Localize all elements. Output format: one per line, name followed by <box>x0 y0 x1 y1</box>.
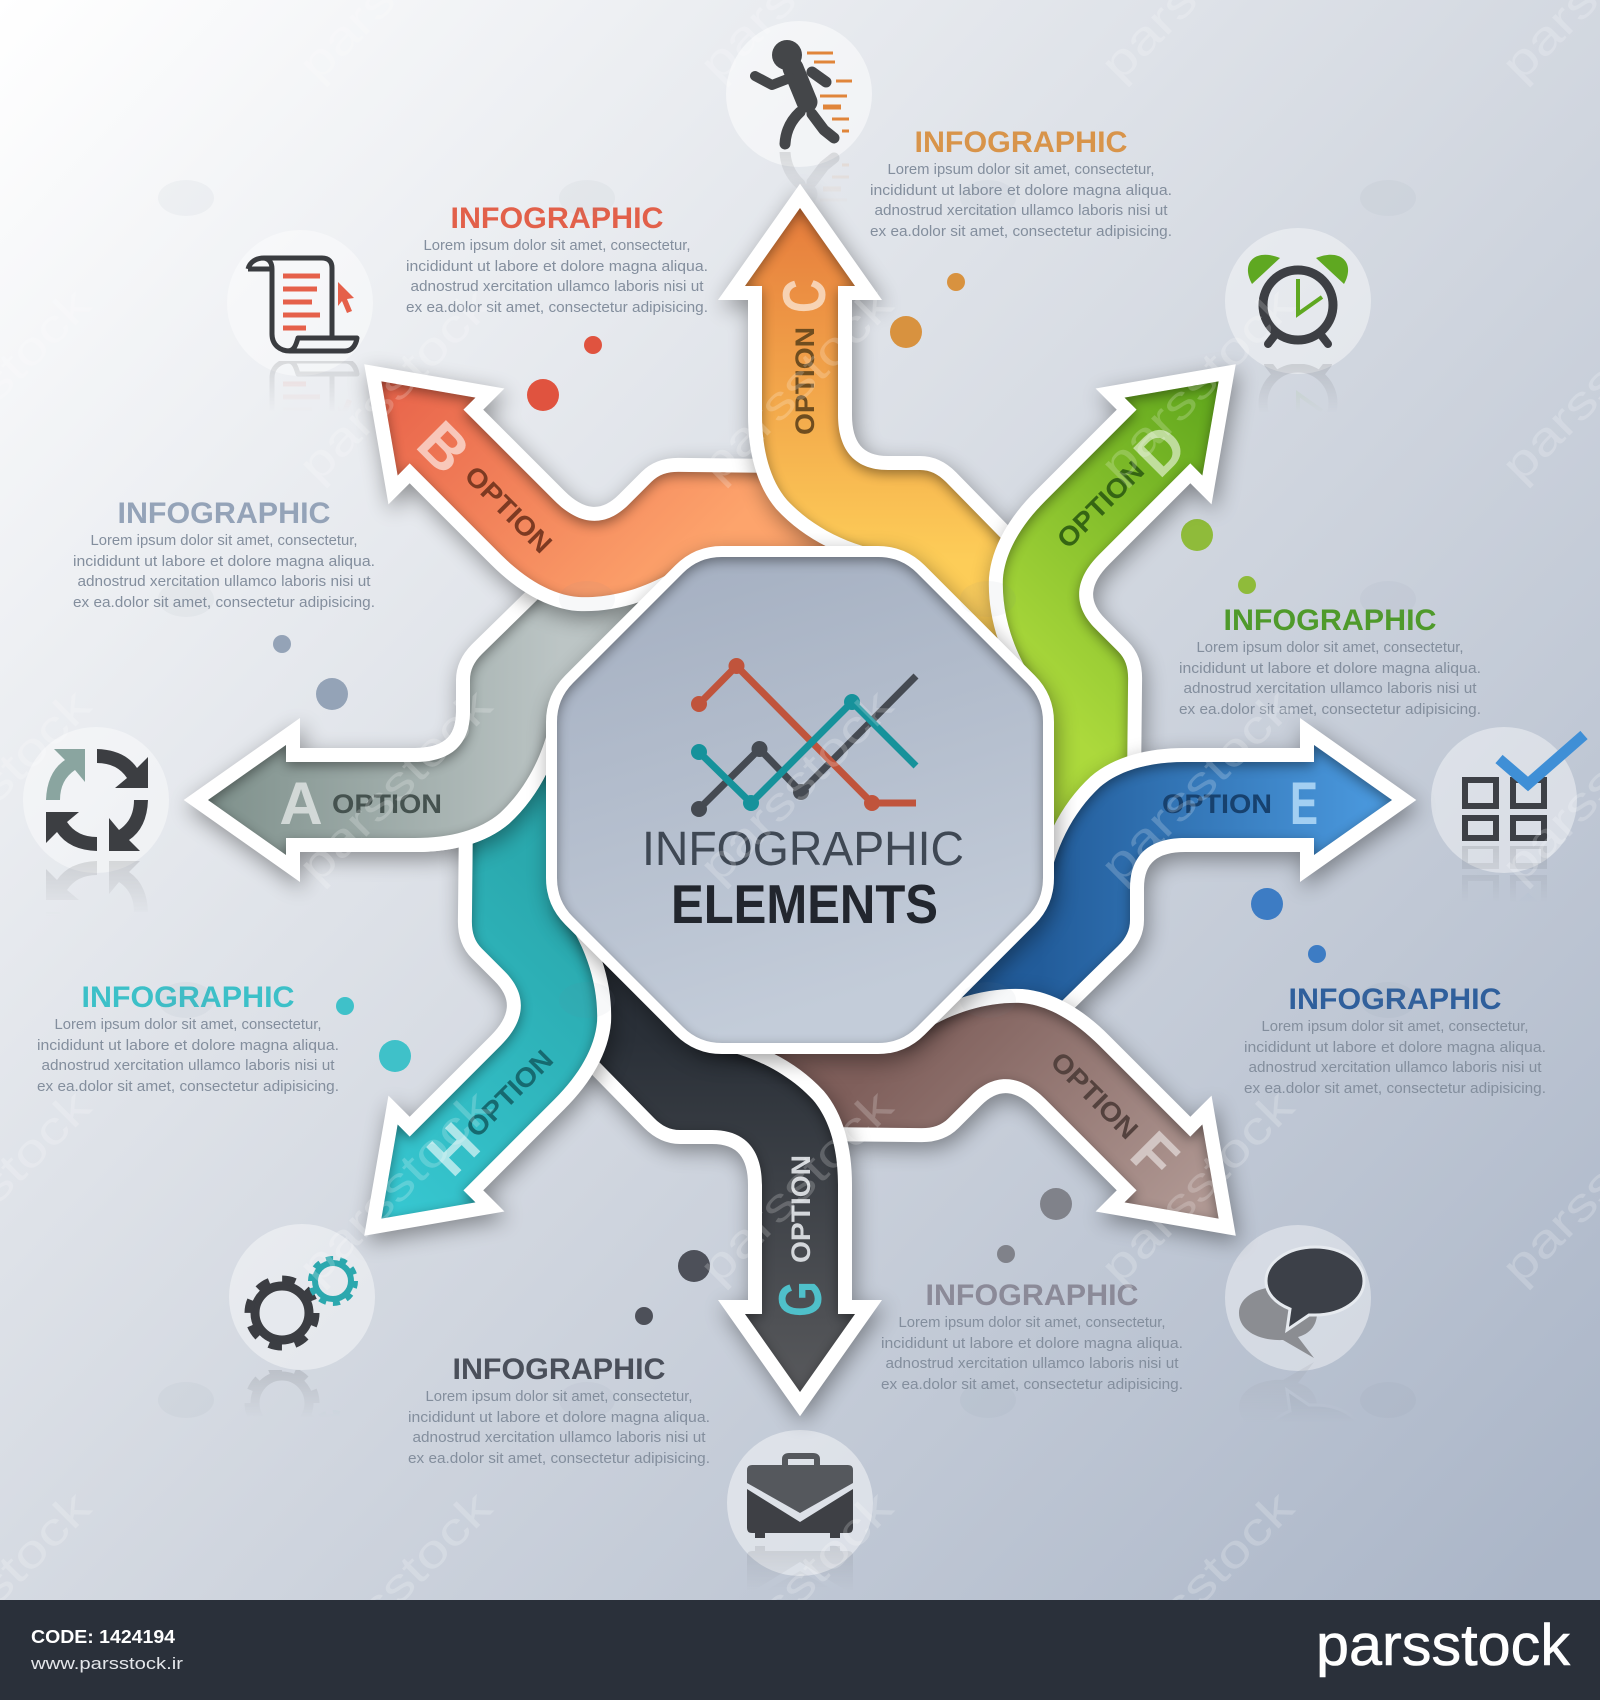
dots: option B <box>527 336 602 411</box>
arrow E: E <box>1290 770 1318 837</box>
icon: document scroll with cursor (B) <box>246 256 360 396</box>
watermark text: parsstock <box>1090 277 1304 491</box>
text block B: ex ea.dolor sit amet, consectetur adipisicing. <box>406 300 708 316</box>
arrow C <box>745 208 1040 640</box>
arrow G: G <box>767 1281 834 1317</box>
text block A: adnostrud xercitation ullamco laboris nisi ut <box>78 574 370 590</box>
icon: gears (H) <box>229 1224 375 1402</box>
text block D: INFOGRAPHIC <box>1224 604 1436 637</box>
arrow G: OPTION <box>786 1155 816 1263</box>
text block G <box>408 1353 710 1467</box>
text block C: incididunt ut labore et dolore magna aliqua. <box>870 183 1172 199</box>
watermark text: parsstock <box>288 1079 502 1293</box>
dots: option F <box>997 1188 1072 1263</box>
watermark text: parsstock <box>689 277 903 491</box>
arrow H: H <box>414 1110 492 1188</box>
text block E: INFOGRAPHIC <box>1288 983 1502 1016</box>
title <box>642 823 964 935</box>
text block H: ex ea.dolor sit amet, consectetur adipisicing. <box>37 1079 339 1095</box>
watermark text: parsstock <box>288 678 502 892</box>
text block D: ex ea.dolor sit amet, consectetur adipisicing. <box>1179 702 1481 718</box>
logo: parsstock <box>1316 1613 1571 1678</box>
text block H: incididunt ut labore et dolore magna aliqua. <box>37 1038 339 1054</box>
line chart icon <box>691 658 916 817</box>
icon: briefcase (G) <box>727 1430 873 1576</box>
footer bar <box>0 1600 1600 1700</box>
arrow D <box>874 343 1388 857</box>
dots: option A <box>273 635 348 710</box>
arrow D: OPTION <box>1051 455 1150 554</box>
text block D <box>1179 604 1481 718</box>
central octagon panel <box>552 552 1048 1048</box>
text block A: incididunt ut labore et dolore magna aliqua. <box>73 554 375 570</box>
title: INFOGRAPHIC <box>642 823 964 876</box>
text block B: Lorem ipsum dolor sit amet, consectetur, <box>424 238 690 254</box>
arrow F <box>743 874 1257 1388</box>
arrow C: C <box>771 279 838 313</box>
arrow A label: A <box>279 770 323 837</box>
text block G: ex ea.dolor sit amet, consectetur adipisicing. <box>408 1451 710 1467</box>
icon: alarm clock (D) <box>1225 228 1371 400</box>
text block G: INFOGRAPHIC <box>452 1353 666 1386</box>
arrow A <box>208 560 640 855</box>
watermark text: parsstock <box>288 277 502 491</box>
arrow A label: OPTION <box>332 789 442 819</box>
watermark text: parsstock <box>689 1079 903 1293</box>
icon: speech bubbles (F) <box>1225 1225 1371 1398</box>
watermark text: parsstock <box>288 1480 502 1694</box>
text block H: Lorem ipsum dolor sit amet, consectetur, <box>54 1017 322 1033</box>
text block E <box>1244 983 1546 1097</box>
arrow B <box>343 212 857 726</box>
arrow E: OPTION <box>1162 789 1272 819</box>
icon: running man (C) <box>726 21 872 192</box>
text block C <box>870 126 1172 240</box>
text block E: incididunt ut labore et dolore magna aliqua. <box>1244 1040 1546 1056</box>
text block F: incididunt ut labore et dolore magna aliqua. <box>881 1336 1183 1352</box>
text block G: adnostrud xercitation ullamco laboris nisi ut <box>412 1430 706 1446</box>
text block C: INFOGRAPHIC <box>914 126 1128 159</box>
text block F: adnostrud xercitation ullamco laboris nisi ut <box>886 1356 1178 1372</box>
text block H: adnostrud xercitation ullamco laboris nisi ut <box>42 1058 334 1074</box>
dots: option D <box>1181 519 1256 594</box>
text block B: INFOGRAPHIC <box>450 202 664 235</box>
watermark text: parsstock <box>689 1480 903 1694</box>
code and website: CODE: 1424194 <box>31 1627 175 1647</box>
dots: option H <box>336 997 411 1072</box>
arrow E <box>960 745 1392 1040</box>
arrow B: OPTION <box>459 460 558 559</box>
text block B: incididunt ut labore et dolore magna aliqua. <box>406 259 708 275</box>
arrow F: F <box>1118 1119 1191 1192</box>
code and website <box>30 1627 183 1673</box>
watermark logos <box>158 180 1416 1418</box>
title: ELEMENTS <box>671 873 938 935</box>
icon: checklist grid (E) <box>1431 727 1588 881</box>
watermark text: parsstock <box>1090 1480 1304 1694</box>
text block F: ex ea.dolor sit amet, consectetur adipisicing. <box>881 1377 1183 1393</box>
dots: option C <box>890 273 965 348</box>
text block A: Lorem ipsum dolor sit amet, consectetur, <box>90 533 358 549</box>
arrow B: B <box>405 408 483 486</box>
text block H: INFOGRAPHIC <box>82 981 294 1014</box>
text block D: adnostrud xercitation ullamco laboris nisi ut <box>1184 681 1476 697</box>
dots: option E <box>1251 888 1326 963</box>
watermark text: parsstock <box>1090 678 1304 892</box>
text block C: Lorem ipsum dolor sit amet, consectetur, <box>888 162 1154 178</box>
text block B: adnostrud xercitation ullamco laboris nisi ut <box>410 279 704 295</box>
text block D: incididunt ut labore et dolore magna aliqua. <box>1179 661 1481 677</box>
watermark text: parsstock <box>689 678 903 892</box>
text block A <box>73 497 375 611</box>
arrow C: OPTION <box>790 327 820 435</box>
icon: recycle arrows (A) <box>23 727 169 900</box>
arrow A label <box>279 770 442 837</box>
text block E: Lorem ipsum dolor sit amet, consectetur, <box>1262 1019 1528 1035</box>
text block C: ex ea.dolor sit amet, consectetur adipisicing. <box>870 224 1172 240</box>
arrow H <box>212 743 726 1257</box>
text block F: INFOGRAPHIC <box>926 1279 1138 1312</box>
text block E: adnostrud xercitation ullamco laboris nisi ut <box>1248 1060 1542 1076</box>
text block A: ex ea.dolor sit amet, consectetur adipisicing. <box>73 595 375 611</box>
arrow A overlap over arrow H <box>419 714 546 862</box>
text block F <box>881 1279 1183 1393</box>
watermark text: parsstock <box>1090 1079 1304 1293</box>
text block B <box>406 202 708 316</box>
text block D: Lorem ipsum dolor sit amet, consectetur, <box>1196 640 1464 656</box>
code and website: www.parsstock.ir <box>30 1654 183 1673</box>
arrow F: OPTION <box>1045 1046 1144 1145</box>
text block H <box>37 981 339 1095</box>
arrow H: OPTION <box>460 1044 559 1143</box>
arrow D: D <box>1121 411 1199 489</box>
text block G: incididunt ut labore et dolore magna aliqua. <box>408 1410 710 1426</box>
text block E: ex ea.dolor sit amet, consectetur adipisicing. <box>1244 1081 1546 1097</box>
text block G: Lorem ipsum dolor sit amet, consectetur, <box>426 1389 692 1405</box>
dots: option G <box>635 1250 710 1325</box>
text block C: adnostrud xercitation ullamco laboris nisi ut <box>874 203 1168 219</box>
text block F: Lorem ipsum dolor sit amet, consectetur, <box>898 1315 1166 1331</box>
arrow G <box>560 960 855 1392</box>
text block A: INFOGRAPHIC <box>118 497 330 530</box>
